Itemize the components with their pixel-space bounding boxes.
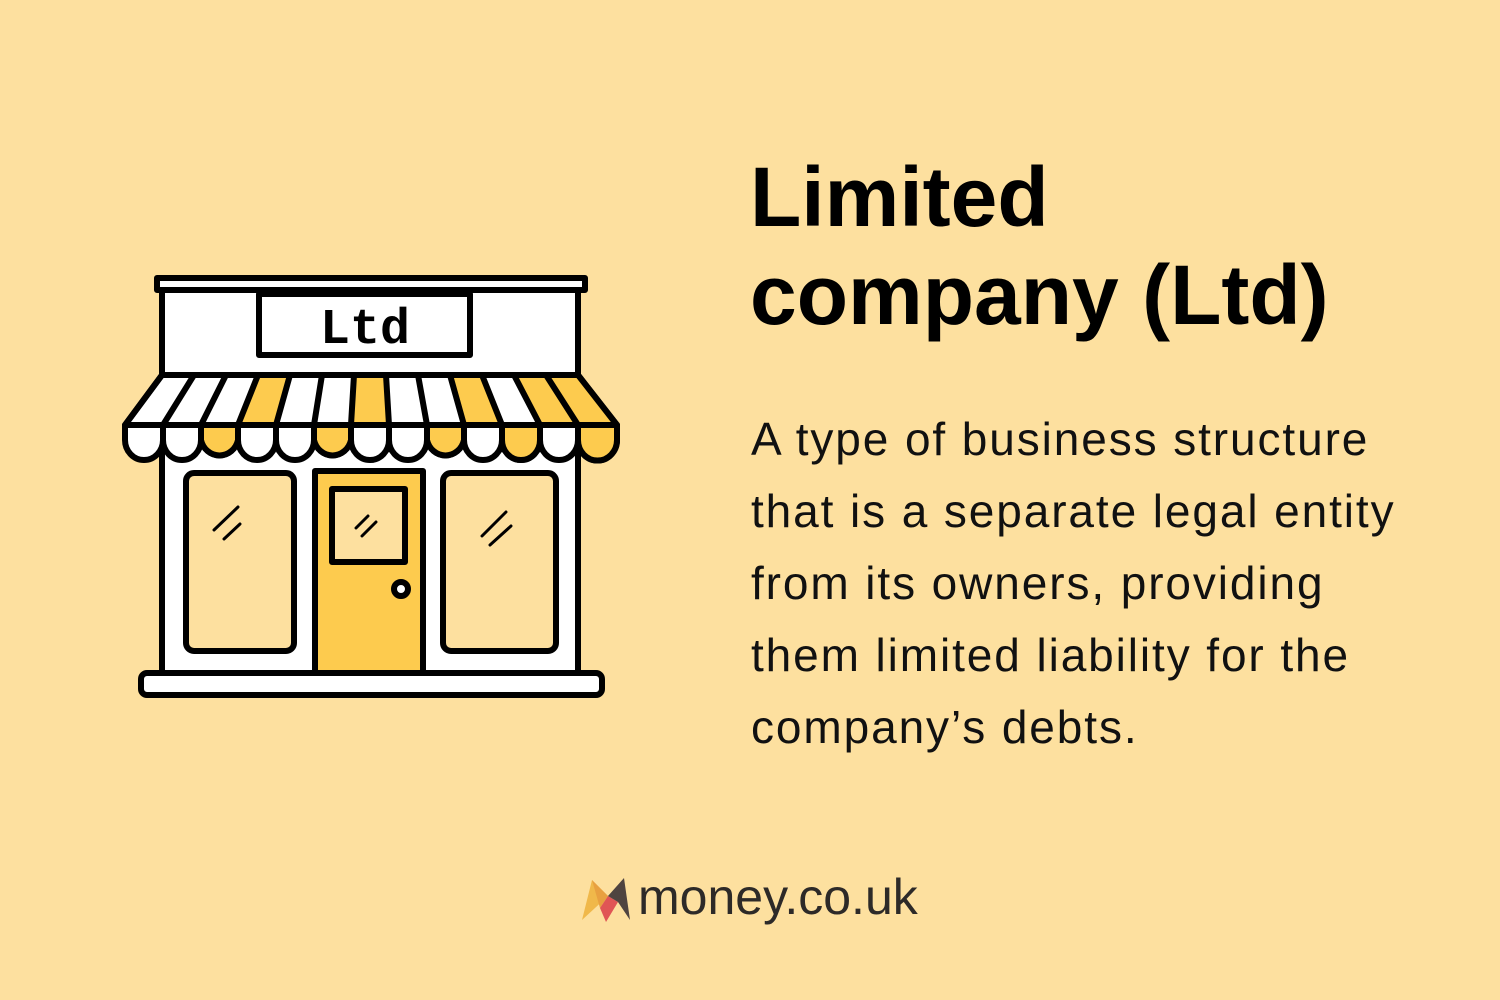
body text — [751, 413, 1395, 753]
body text: from its owners, providing — [751, 557, 1324, 609]
fascia: Ltd — [320, 302, 410, 359]
windows and door — [186, 471, 556, 675]
title: company (Ltd) — [750, 248, 1329, 342]
title — [750, 150, 1329, 342]
icon: logo mark — [582, 878, 630, 922]
logo: money.co.uk — [638, 869, 918, 925]
fascia — [157, 278, 585, 677]
body text: that is a separate legal entity — [751, 485, 1395, 537]
base — [141, 673, 602, 695]
icon: shop storefront — [122, 275, 620, 698]
awning — [125, 375, 617, 461]
body text: A type of business structure — [751, 413, 1369, 465]
body text: company’s debts. — [751, 701, 1139, 753]
title: Limited — [750, 150, 1049, 244]
body text: them limited liability for the — [751, 629, 1350, 681]
